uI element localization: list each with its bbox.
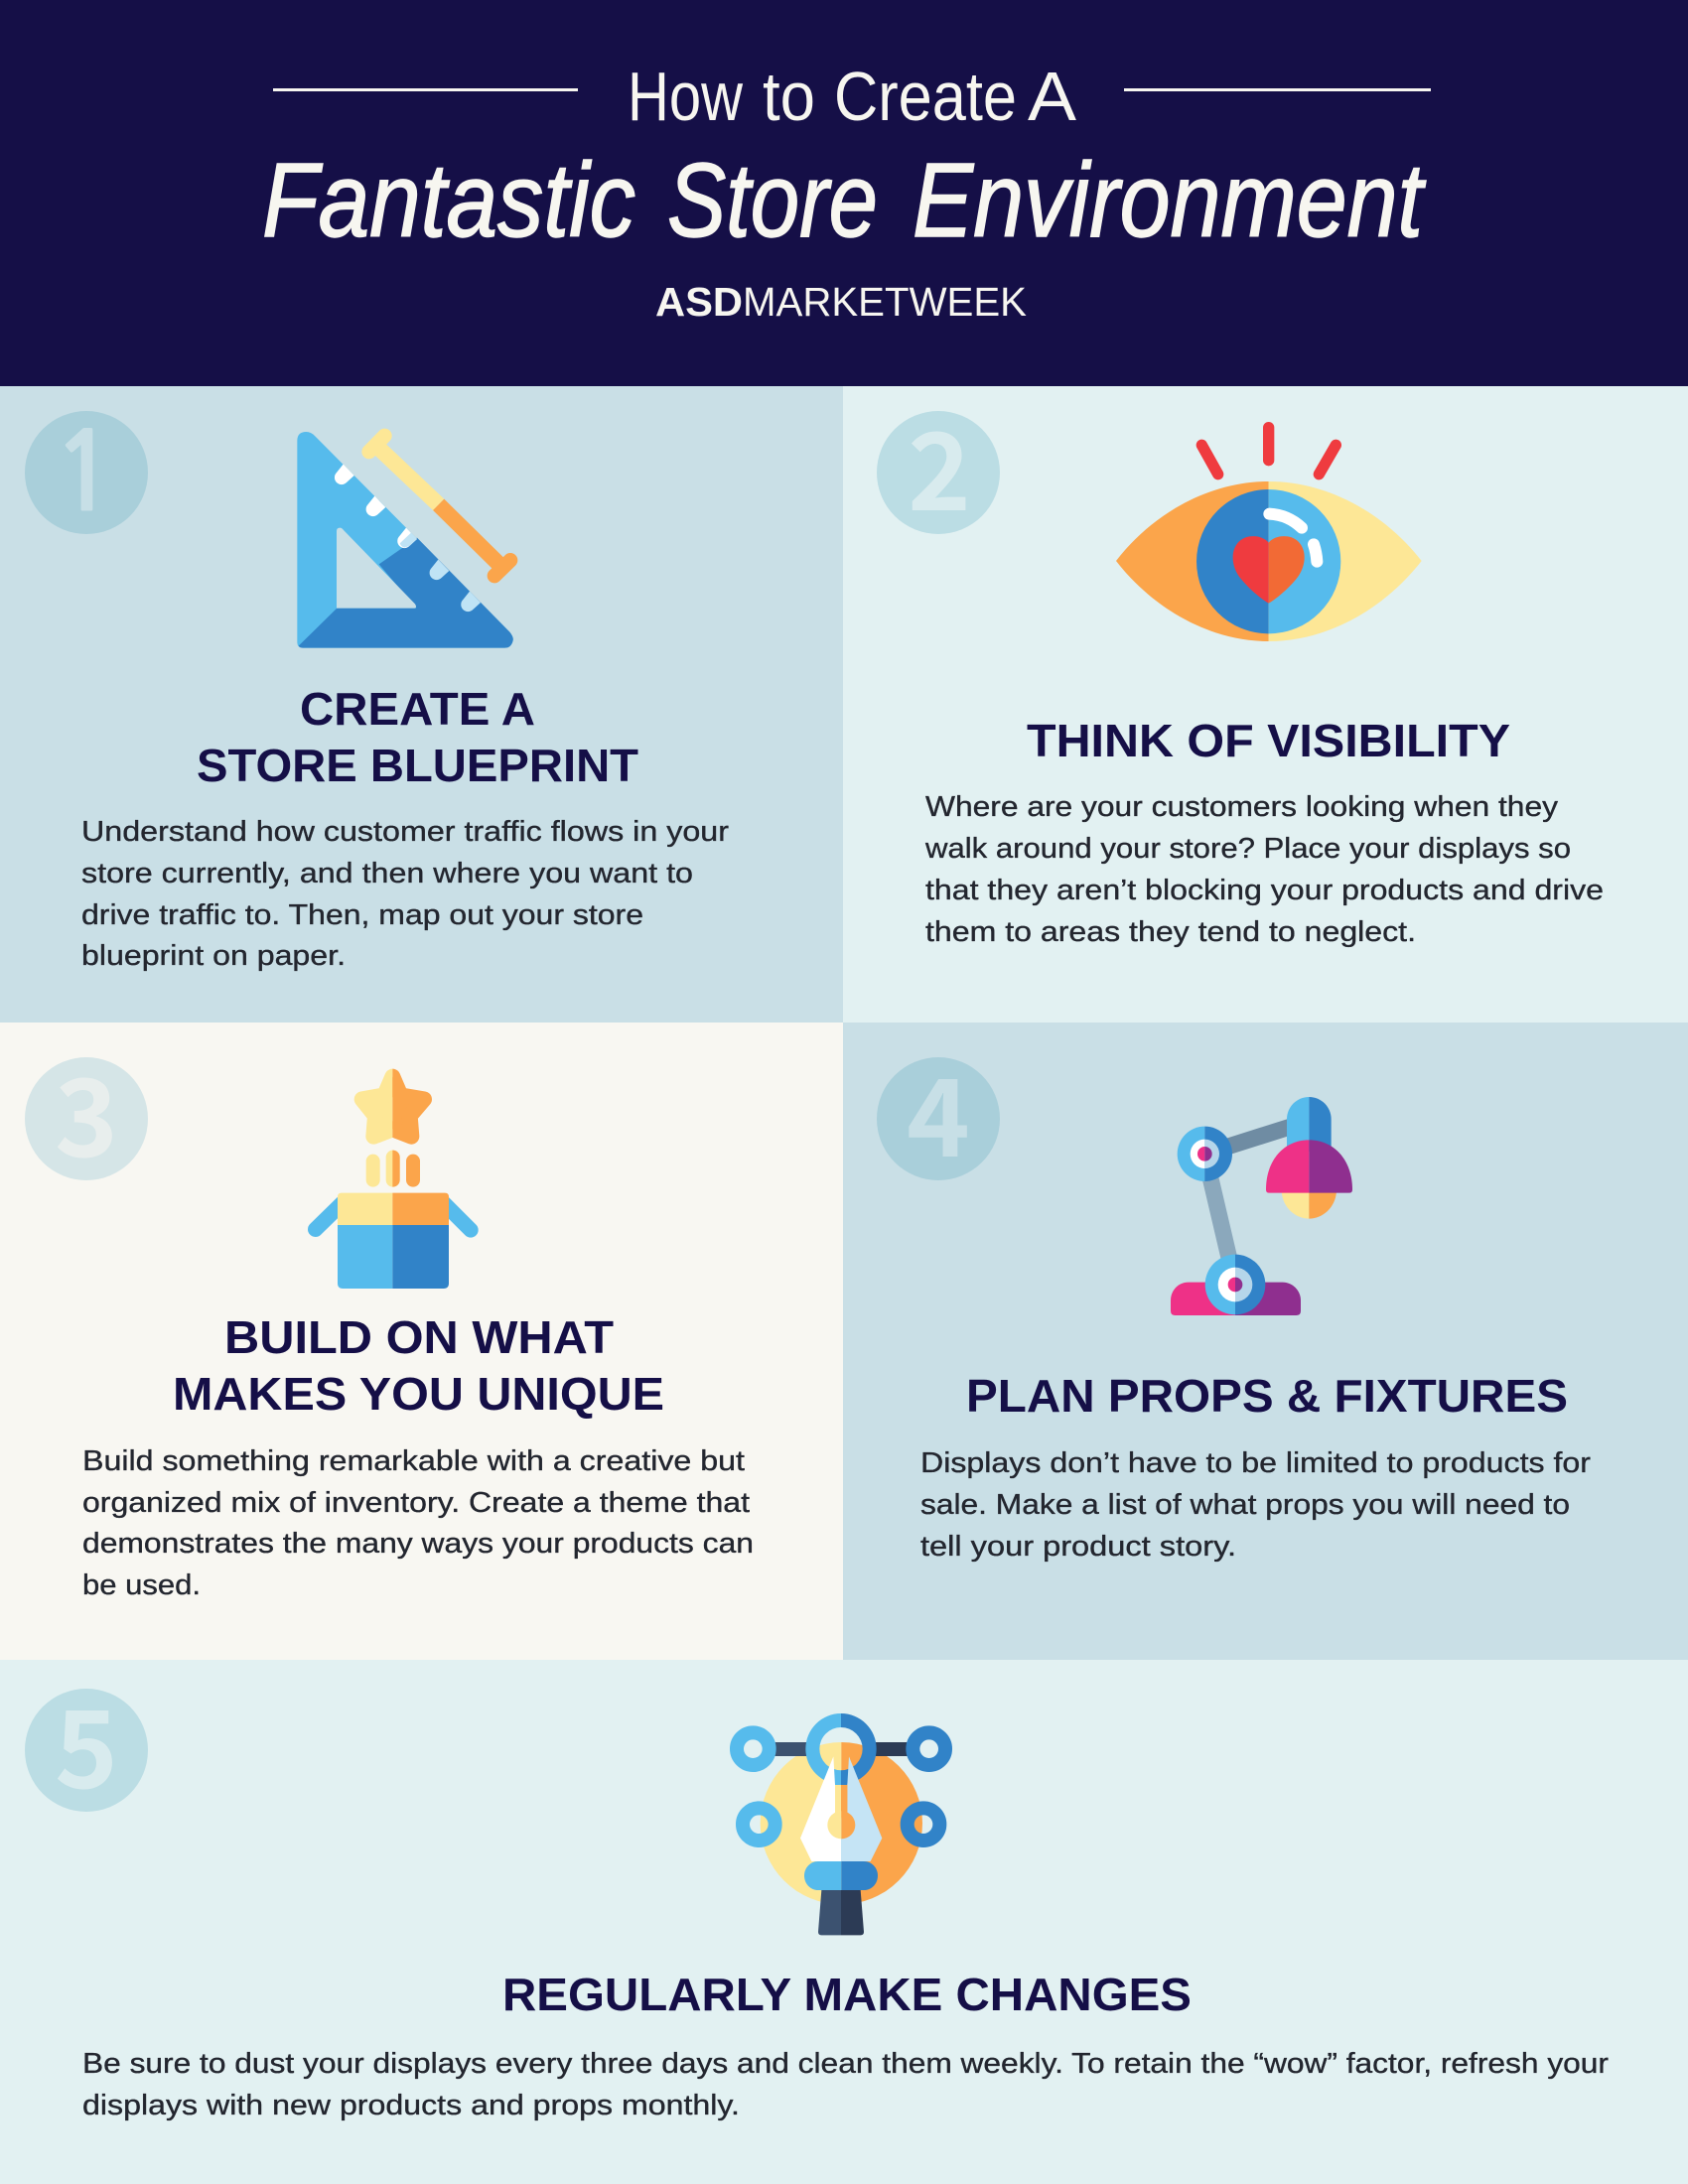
body text: Build something remarkable with a creative but — [82, 1445, 745, 1477]
title: how to create a: A — [1028, 58, 1076, 135]
body text: tell your product story. — [920, 1531, 1236, 1563]
body text: that they aren’t blocking your products and drive — [925, 875, 1604, 906]
number badge 1 — [25, 411, 148, 534]
icon: desk lamp — [1171, 1097, 1352, 1315]
heading: CREATE A — [300, 683, 535, 735]
panel: step 2 think of visibility — [843, 386, 1688, 1023]
body text: organized mix of inventory. Create a theme that — [82, 1487, 750, 1519]
body text: them to areas they tend to neglect. — [925, 916, 1416, 948]
body text: Displays don’t have to be limited to products for — [920, 1447, 1591, 1479]
panel: step 3 build on what makes you unique — [0, 1023, 843, 1660]
number badge 2: 2 — [908, 387, 971, 542]
body text — [920, 1447, 1591, 1563]
number badge 3: 3 — [55, 1033, 118, 1188]
body text — [82, 2048, 1609, 2121]
body text: displays with new products and props monthly. — [82, 2090, 740, 2121]
number badge 4: 4 — [907, 1033, 970, 1188]
number badge 5: 5 — [55, 1665, 118, 1820]
body text: Be sure to dust your displays every three days and clean them weekly. To retain the “wow” factor, refresh your — [82, 2048, 1609, 2080]
header banner — [0, 0, 1688, 386]
panel: step 1 create a store blueprint — [0, 386, 843, 1023]
number badge 3 — [25, 1033, 148, 1188]
number badge 5 — [25, 1665, 148, 1820]
number badge 1: 1 — [52, 419, 117, 527]
heading: BUILD ON WHAT — [224, 1311, 614, 1363]
heading: REGULARLY MAKE CHANGES — [502, 1969, 1192, 2020]
title: fantastic store environment: Fantastic — [262, 142, 635, 259]
title: how to create a: How — [628, 58, 743, 135]
logo: asd market week: ASD — [655, 279, 743, 325]
body text — [924, 791, 1604, 948]
heading: THINK OF VISIBILITY — [1027, 715, 1510, 766]
heading — [173, 1311, 664, 1420]
title: fantastic store environment: Environment — [913, 142, 1427, 259]
body text: sale. Make a list of what props you will need to — [920, 1489, 1570, 1521]
title: fantastic store environment: Store — [667, 142, 878, 259]
heading: PLAN PROPS & FIXTURES — [966, 1370, 1568, 1422]
body text — [81, 816, 729, 972]
heading — [197, 683, 638, 791]
icon: pen tool nib — [737, 1713, 945, 1935]
title: how to create a: to — [763, 58, 815, 135]
body text: be used. — [82, 1570, 201, 1601]
body text: walk around your store? Place your displays so — [924, 833, 1571, 865]
icon: box with star — [316, 1077, 471, 1289]
number badge 4 — [877, 1033, 1000, 1188]
title: how to create a: Create — [834, 58, 1017, 135]
body text: blueprint on paper. — [81, 940, 346, 972]
body text: drive traffic to. Then, map out your store — [81, 899, 643, 931]
body text — [82, 1445, 754, 1601]
body text: Where are your customers looking when they — [925, 791, 1559, 823]
panel: step 5 regularly make changes — [0, 1660, 1688, 2184]
logo: asd market week: MARKETWEEK — [743, 279, 1027, 325]
number badge 2 — [877, 387, 1000, 542]
panel: step 4 plan props and fixtures — [843, 1023, 1688, 1660]
heading: STORE BLUEPRINT — [197, 740, 638, 791]
heading: MAKES YOU UNIQUE — [173, 1368, 664, 1420]
body text: Understand how customer traffic flows in your — [81, 816, 729, 848]
icon: eye with heart — [1116, 428, 1422, 641]
body text: demonstrates the many ways your products can — [82, 1528, 754, 1560]
body text: store currently, and then where you want to — [81, 858, 693, 889]
icon: set square and ruler — [297, 432, 513, 648]
